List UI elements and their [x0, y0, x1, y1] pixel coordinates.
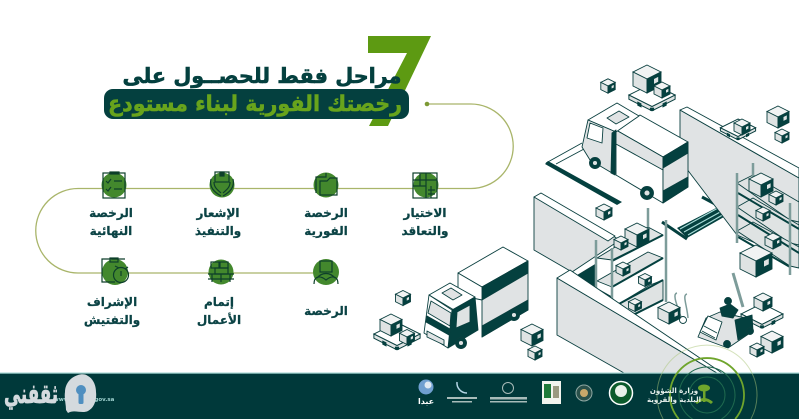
back wall left — [534, 193, 620, 272]
watermark text: ثقفني — [4, 379, 58, 410]
logo: blue globe: عبدا — [418, 397, 434, 406]
boxes on floating pallet — [601, 65, 789, 143]
title pill — [104, 89, 409, 119]
step label: supervision and inspection — [84, 295, 140, 328]
floor boxes right — [750, 331, 783, 357]
pallet and boxes by truck two — [374, 290, 543, 360]
step label: completion of works: إتمام — [204, 295, 234, 310]
step label: selection and contracting: والتعاقد — [401, 224, 449, 239]
truck one — [582, 103, 688, 203]
website text: www.momra.gov.sa — [54, 397, 115, 403]
step label: final license: النهائية — [90, 224, 132, 238]
step label: supervision and inspection: الإشراف — [87, 295, 137, 309]
title line 2: رخصتك الفورية لبناء مستودع — [108, 92, 402, 117]
ministry text: وزارة الشؤون — [650, 387, 698, 395]
step label: completion of works — [197, 295, 241, 327]
watermark bulb — [76, 385, 86, 404]
step label: final license: الرخصة — [89, 206, 133, 220]
icon: license — [313, 259, 339, 285]
footer top line — [0, 372, 799, 374]
ministry text: البلدية والقروية — [647, 396, 701, 404]
logo: authority — [490, 382, 527, 402]
icon: instant license — [314, 172, 338, 198]
logo: emblem — [576, 385, 592, 401]
step label: instant license — [304, 206, 348, 239]
front wall — [557, 270, 722, 373]
step label: notification and execution: والتنفيذ — [195, 224, 241, 239]
step label: final license — [89, 206, 133, 238]
icon: completion of works — [208, 260, 234, 284]
vision rings — [657, 345, 757, 419]
icon: final license — [102, 172, 126, 198]
step label: instant license: الرخصة — [304, 206, 348, 220]
saudi emblem — [695, 384, 713, 404]
truck two — [424, 247, 528, 348]
step label: instant license: الفورية — [304, 224, 348, 239]
warehouse illustration — [374, 65, 799, 373]
step label: selection and contracting — [401, 206, 449, 239]
path start dot — [425, 102, 429, 106]
floor markings — [545, 143, 732, 239]
ministry text — [647, 387, 701, 404]
boxes on right shelving — [740, 173, 783, 277]
step label: supervision and inspection: والتفتيش — [84, 313, 140, 328]
right shelving — [737, 163, 799, 275]
footer band — [0, 373, 799, 419]
logo: green seal — [610, 382, 632, 404]
big number 7 — [368, 36, 431, 126]
forklift with pallet — [698, 273, 783, 348]
title line 1: مراحل فقط للحصــول على — [122, 64, 402, 88]
logo: white square — [542, 381, 561, 404]
step label: notification and execution: الإشعار — [195, 206, 240, 220]
step label: license: الرخصة — [304, 304, 348, 318]
step label: selection and contracting: الاختيار — [403, 206, 446, 220]
back wall right — [680, 107, 799, 262]
watermark blob — [65, 374, 96, 413]
logo: crescent — [447, 382, 477, 402]
icon: notification and execution — [210, 172, 234, 198]
process path line — [36, 104, 513, 273]
logo: blue globe — [418, 380, 434, 406]
left shelving — [573, 208, 666, 315]
icon: supervision and inspection — [102, 258, 128, 285]
step label: completion of works: الأعمال — [197, 312, 241, 327]
icon: selection and contracting — [413, 172, 438, 198]
hand truck with box — [658, 293, 688, 324]
step label: notification and execution — [195, 206, 241, 239]
